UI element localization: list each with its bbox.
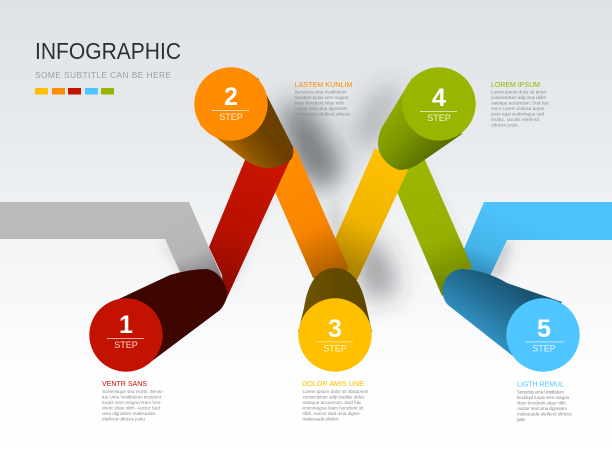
step 2 badge bbox=[194, 67, 268, 141]
text block: step 4: LOREM IPSUM bbox=[491, 80, 540, 89]
step 4 badge: 4 bbox=[432, 84, 446, 112]
colour key swatches bbox=[35, 88, 114, 94]
step 4 badge: STEP bbox=[427, 113, 451, 123]
text block: step 3: nibh. Auctor Sed urna digne- bbox=[302, 411, 361, 416]
text block: step 5 bbox=[516, 380, 573, 422]
cylinder 2 bbox=[200, 78, 293, 168]
text block: step 4 bbox=[490, 80, 550, 128]
text block: step 3: DOLOR AMIS UNE bbox=[302, 379, 364, 388]
cylinder 4 bbox=[378, 78, 462, 170]
step 3 badge: STEP bbox=[323, 344, 347, 354]
title: INFOGRAPHIC bbox=[35, 38, 181, 64]
text block: step 1: VENTR SANS bbox=[102, 379, 147, 388]
ribbon: yellow bbox=[325, 148, 408, 280]
text block: step 4: moltis. Iaculis eleifend bbox=[491, 117, 539, 122]
step 5 badge bbox=[506, 298, 580, 372]
text block: step 2: Senectus urna Vestibulum bbox=[294, 90, 347, 94]
text block: step 5: Auctor Sed urna dignissim bbox=[517, 406, 567, 411]
subtitle: SOME SUBTITLE CAN BE HERE bbox=[35, 70, 171, 80]
text block: step 2: Auctor Sed urna dignissim bbox=[294, 106, 348, 111]
text block: step 5: Nam hendrerit vitae nibh. bbox=[517, 400, 567, 406]
text block: step 1: eleifend ultrices justo bbox=[102, 416, 145, 422]
ribbon: red bbox=[209, 160, 290, 302]
text block: step 3 bbox=[302, 379, 369, 422]
ribbon: blue exit bar bbox=[455, 202, 612, 276]
soft drop shadows bbox=[165, 85, 512, 302]
text block: step 5: tincidunt turpis sem magna bbox=[517, 395, 569, 400]
text block: step 5: Senectus urna Vestibulum bbox=[517, 390, 564, 394]
step 4 badge bbox=[402, 67, 476, 141]
text block: step 1: uma dignissim malesuada bbox=[102, 411, 155, 416]
text block: step 5: malesuada eleifend ultrices bbox=[517, 412, 573, 416]
step 5 badge: 5 bbox=[537, 315, 551, 343]
text block: step 3: natoque accumsan. Sed hac bbox=[302, 400, 362, 405]
text block: step 2: malesuada eleifend ultrices bbox=[294, 112, 351, 116]
text block: step 3: malesuada eleifen bbox=[302, 416, 339, 422]
text block: step 3: enimmagna Nam hendrerit vit bbox=[302, 406, 364, 410]
step 3 badge: 3 bbox=[328, 315, 342, 343]
text block: step 4: ultrices justo. bbox=[491, 122, 519, 128]
step 1 badge bbox=[89, 298, 163, 372]
text block: step 4: enim Lorem dolissa turpis bbox=[491, 106, 545, 111]
text block: step 1: Scelerisque sed morbi. Senec- bbox=[102, 389, 164, 394]
text block: step 3: Lorem ipsum dolor sit abadonne bbox=[302, 389, 369, 394]
step 1 badge: STEP bbox=[114, 340, 138, 350]
text block: step 2: LASTEM KUNLIM bbox=[294, 80, 352, 89]
text block: step 2: Nam hendrerit vitae nibh bbox=[294, 100, 345, 106]
text block: step 4: Lorem ipsum dolor sit amet bbox=[491, 90, 547, 94]
step 1 badge: 1 bbox=[119, 311, 133, 339]
cylinder 5 bbox=[443, 269, 562, 364]
text block: step 2 bbox=[294, 80, 352, 116]
text block: step 1: drerit Vitae nibh. Auctor Sed bbox=[102, 406, 160, 410]
text block: step 1: turpis sem magna Nam hen- bbox=[102, 400, 162, 405]
text block: step 4: justo eget scelerisque sed bbox=[490, 112, 544, 116]
cylinder 3 bbox=[298, 268, 372, 332]
text block: step 4: natoque accumsan. Sed hac bbox=[491, 100, 550, 106]
text block: step 2: tincidunt turpis sem magna bbox=[294, 95, 349, 100]
text block: step 5: justo. bbox=[516, 417, 526, 422]
text block: step 4: consectetuer adip isus dolor bbox=[491, 95, 546, 100]
step 5 badge: STEP bbox=[532, 344, 556, 354]
text block: step 1 bbox=[102, 379, 164, 422]
text block: step 5: LIGTH REMUL bbox=[517, 380, 564, 388]
text block: step 1: tus Uma Vestibulum tincidunt bbox=[102, 394, 162, 400]
step 2 badge: STEP bbox=[219, 112, 243, 122]
ribbon: grey entry bar bbox=[0, 202, 224, 282]
step 2 badge: 2 bbox=[224, 83, 238, 111]
ribbon: green bbox=[380, 150, 472, 296]
step 3 badge bbox=[298, 298, 372, 372]
text block: step 3: consectetuer adip isuditur delus bbox=[302, 394, 365, 400]
ribbon: orange bbox=[262, 147, 348, 285]
cylinder 1 bbox=[106, 269, 227, 361]
